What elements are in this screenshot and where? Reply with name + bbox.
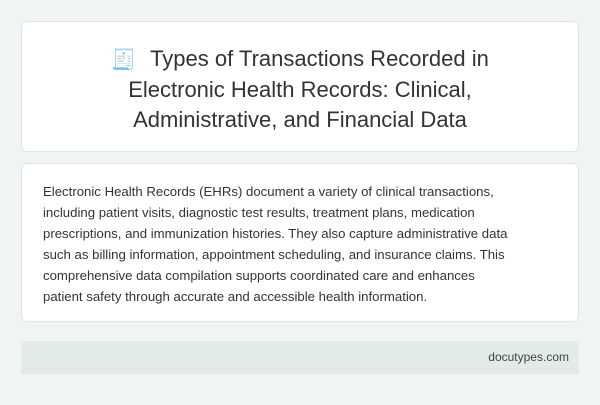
text block: description: Electronic Health Records (EHRs) document a variety of clinical transactions, including patient visits, diagnostic test results, treatment plans, medication prescriptions, and immunization histories. They also capture administrative data such as billing information, appointment scheduling, and insurance claims. This comprehensive data compilation supports coordinated care and enhances patient safety through accurate and accessible health information. [43,184,507,304]
panel: description card [21,163,579,322]
title: 🧾 Types of Transactions Recorded in Electronic Health Records: Clinical, Administrative, and Financial Data [111,46,489,132]
panel: title card [21,21,579,152]
footer text: docutypes.com [488,350,569,364]
footer [21,341,579,374]
